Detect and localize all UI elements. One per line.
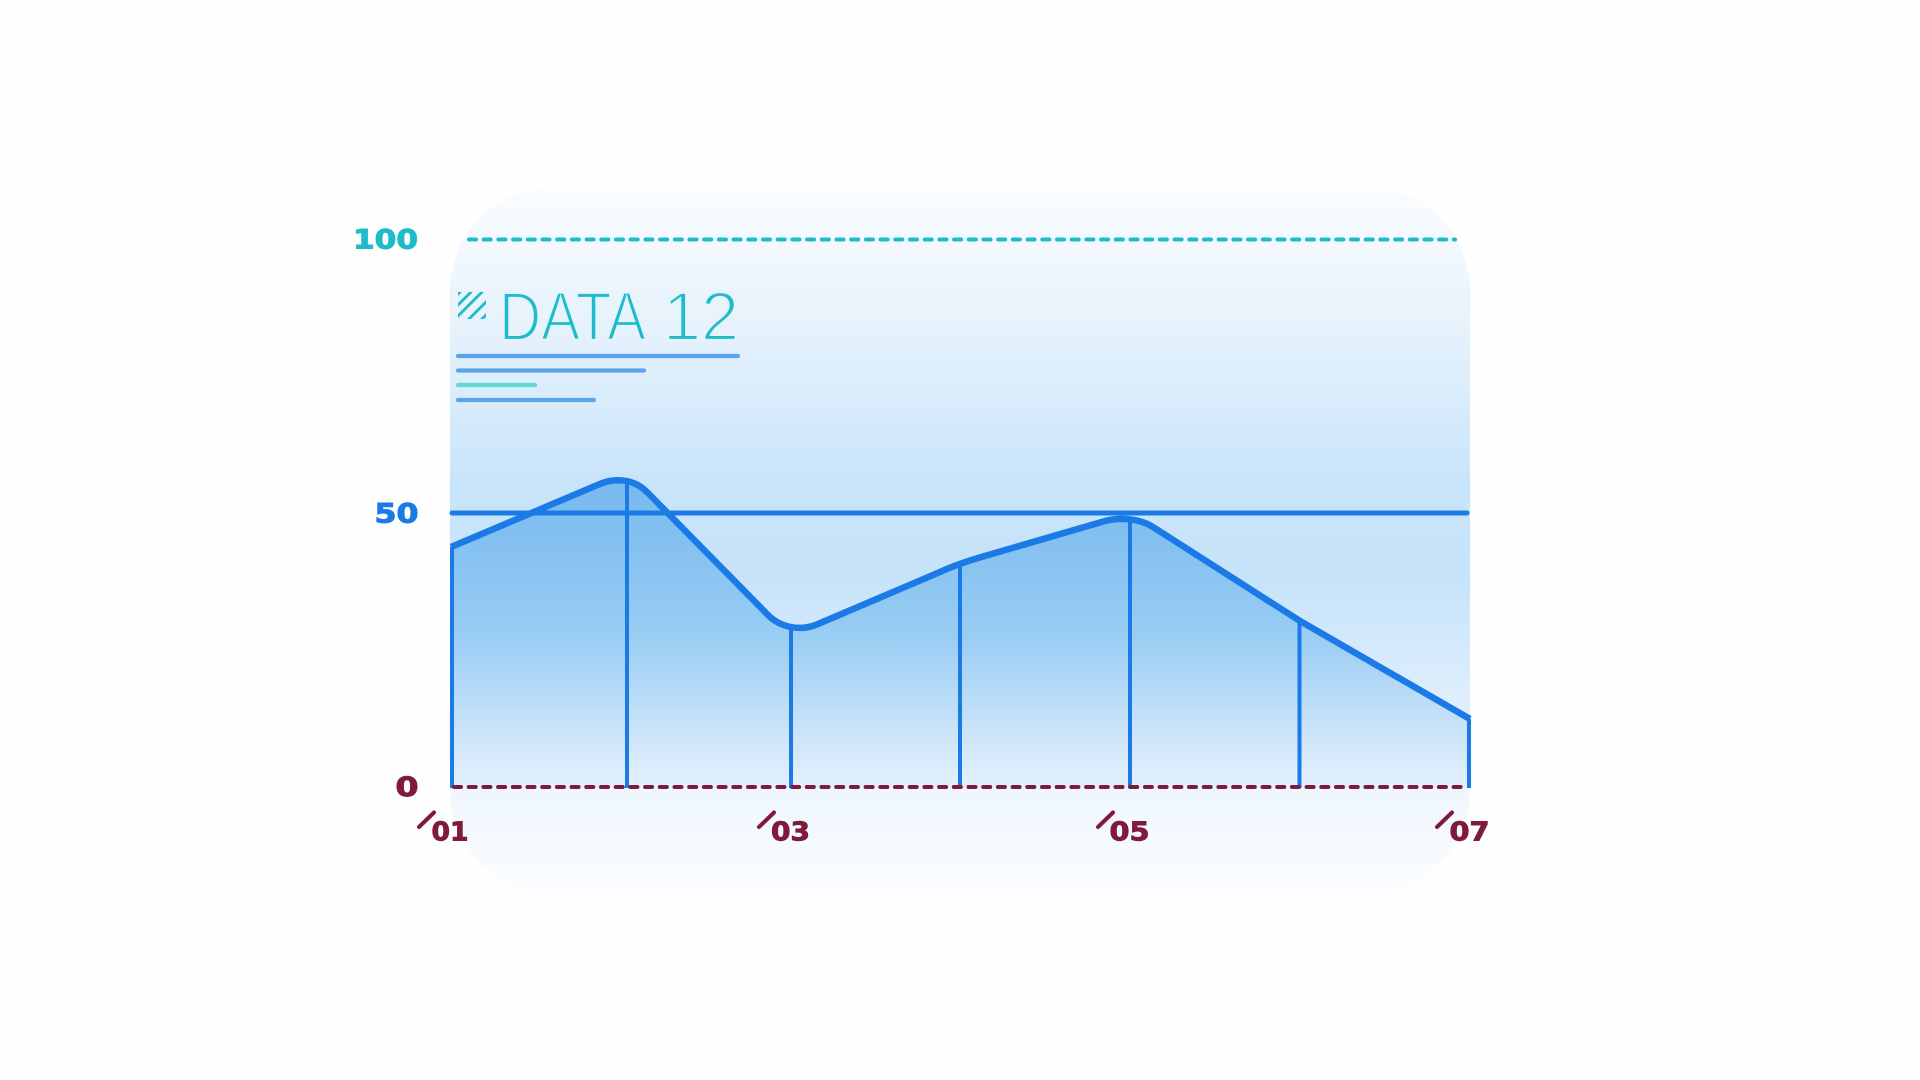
x label: 01 <box>419 812 468 848</box>
axis label: 0: 0 <box>396 772 418 803</box>
icon: hatch square <box>458 292 486 319</box>
area fill under curve <box>451 480 1470 787</box>
legend lines <box>458 356 738 400</box>
baseline: 0 <box>454 785 1466 789</box>
panel: chart background <box>450 186 1470 894</box>
axis label: 100: 100 <box>353 224 418 256</box>
vertical data lines <box>452 480 1469 788</box>
x label: 05 <box>1098 812 1150 848</box>
x label: 01: 01 <box>432 818 468 848</box>
x label: 03: 03 <box>771 818 810 848</box>
data curve <box>451 480 1470 719</box>
x label: 03 <box>759 812 810 848</box>
x label: 07 <box>1437 812 1490 848</box>
reference line: 100 <box>469 238 1455 242</box>
axis label: 50: 50 <box>374 498 418 530</box>
x label: 07: 07 <box>1450 818 1490 848</box>
title: DATA 12: 12 <box>663 278 739 355</box>
title: DATA 12: DATA <box>499 278 646 355</box>
reference line: 50 <box>452 510 1467 516</box>
x label: 05: 05 <box>1110 818 1150 848</box>
